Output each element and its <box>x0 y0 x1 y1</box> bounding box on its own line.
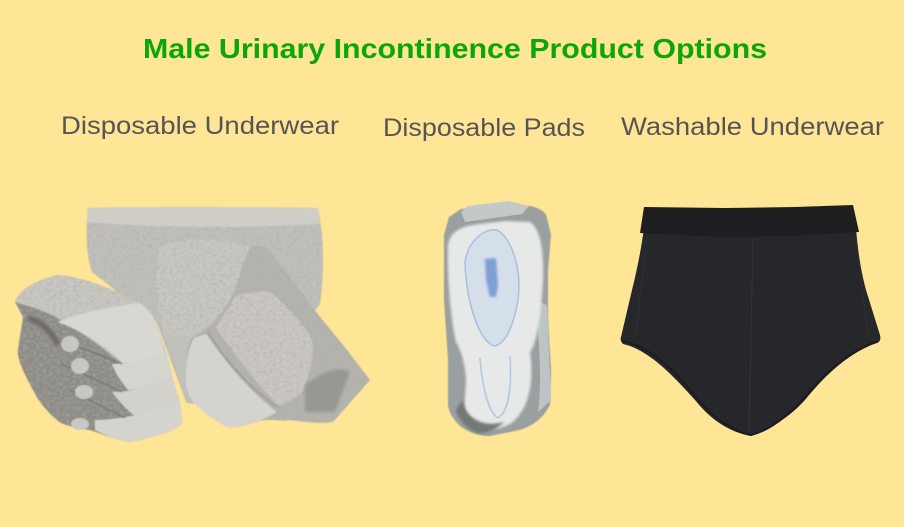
blue centre mark <box>485 258 498 297</box>
pad outer sheet <box>444 206 551 436</box>
illustration: disposable underwear group <box>15 207 370 442</box>
heading: disposable underwear: Disposable Underwear <box>61 112 339 140</box>
illustration: disposable pad <box>444 201 551 436</box>
heading: washable underwear: Washable Underwear <box>621 113 884 141</box>
waistband <box>640 205 859 237</box>
title: Male Urinary Incontinence Product Options <box>143 33 767 64</box>
back pull-up underwear <box>87 207 323 404</box>
folded stack of underwear <box>15 275 182 442</box>
centre seam <box>749 238 753 432</box>
illustration: washable underwear <box>621 205 880 436</box>
side seams <box>636 236 868 335</box>
blue grid area <box>465 230 519 346</box>
single folded underwear <box>185 246 370 427</box>
top tab <box>461 201 529 222</box>
absorbent core <box>448 221 543 429</box>
heading: disposable pads: Disposable Pads <box>383 114 585 142</box>
bottom shadow <box>456 400 504 433</box>
side folds <box>534 300 551 412</box>
leg hem <box>622 341 878 435</box>
briefs body <box>621 228 880 436</box>
lower blue channel <box>480 356 510 418</box>
